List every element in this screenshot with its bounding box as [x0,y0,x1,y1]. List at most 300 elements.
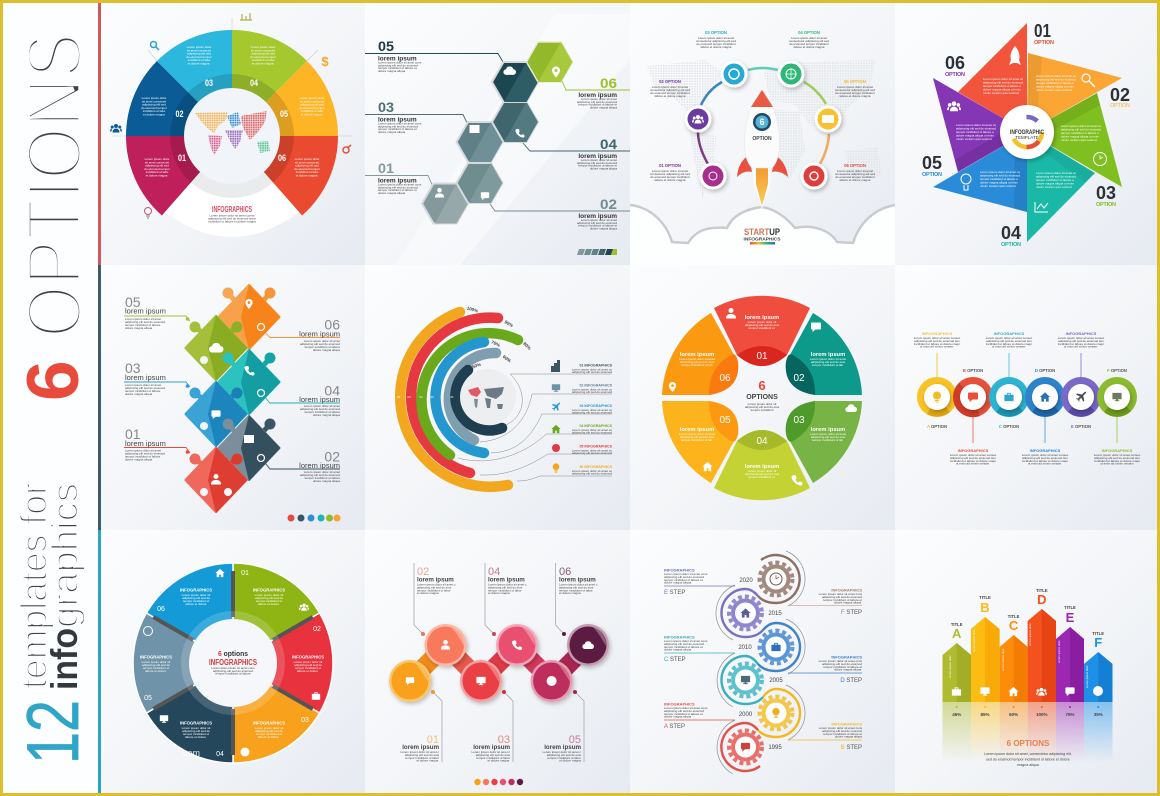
label 02: Lorem ipsum dolor sit amet [304,470,340,474]
top labels: et dolore magna [417,591,439,595]
sector numbers: 05 [280,109,288,119]
label 02: 02 [324,448,340,464]
blade blue [933,132,1027,212]
infographics headings: INFOGRAPHICS [1066,331,1097,336]
blade text: adipiscing elit sed do eiusmod [980,174,1020,178]
sector 01 [714,296,810,366]
sector numbers: 03 [205,78,213,88]
sector text: do eiusmod tempor [141,106,167,110]
sector text: et dolore magna [252,62,274,66]
bottom labels: et dolore magna [487,759,509,763]
label 06: 06 [324,316,340,332]
title labels: TITLE [1008,614,1020,619]
panel: startup rocket [630,30,895,265]
label 05: lorem ipsum [125,306,166,316]
label 06: adipiscing elit sed do eiusmod [300,342,340,346]
top labels: adipiscing elit sed do eius [559,585,594,589]
body text: adipiscing elit sed do eiusmod tem [1022,456,1068,460]
sector text: sit amet consectet [187,48,211,52]
sector body: labore et dolore [297,669,318,673]
body text: adipiscing elit sed do eiusmod tem [914,339,960,343]
option labels: 03 OPTION [705,30,727,35]
label 03: dolore magna aliqua [125,392,153,396]
sector body: adipiscing elit sed do eius [680,435,715,439]
connecting arcs [698,68,829,164]
top labels: 02 [417,566,429,578]
right labels [819,588,862,751]
label 06: tempor incididunt ut labore [305,345,340,349]
panel: rainbow arcs [397,306,613,487]
piece teal [219,349,280,415]
letter labels: B [980,600,990,615]
left labels: tempor incididunt ut labore et [664,712,703,716]
option captions: OPTION [1110,103,1130,109]
left labels: INFOGRAPHICS [664,568,695,572]
label 01: 01 [378,160,394,176]
centre label [745,378,780,412]
option body text: consectetur adipiscing elit sed [835,88,875,92]
gear 2015 [729,596,762,630]
legend body: adipiscing elit sed do eiusmod [572,370,612,374]
top labels: Lorem ipsum dolor sit amet c [417,582,456,586]
right labels: INFOGRAPHICS [831,654,862,660]
label 01: adipiscing elit sed do eiusmod [378,185,418,189]
blade text: Lorem ipsum dolor sit amet co [980,170,1021,174]
bubble 05 [531,660,573,702]
option captions: OPTION [922,172,942,178]
option captions [922,40,1130,248]
sector headings [140,588,324,726]
vertical bar text [948,623,1089,688]
sector 01 [233,563,320,663]
sector body: Lorem ipsum dolor sit [294,660,322,664]
sector text: sit amet consectet [300,99,324,103]
ring 1 [917,377,957,417]
bar E [1056,627,1084,702]
piece green [186,315,248,381]
right labels: tempor incididunt ut labore et [823,598,862,602]
label 04: lorem ipsum [299,395,340,404]
infographics label: INFOGRAPHICS [212,205,252,214]
infographics body: Lorem ipsum dolor sit amet conse [209,214,255,218]
arc numbers: 06 [397,395,400,399]
vertical bar text: Lorem ipsum dolor [1085,665,1089,688]
blade purple [933,78,1027,172]
top labels: lorem ipsum [488,576,525,584]
sector text: sit amet consectet [251,48,275,52]
body text: Lorem ipsum dolor sit amet consec [950,453,997,457]
bottom labels: Lorem ipsum dolor sit amet c [471,750,510,754]
body text: ut enim ad minim veniam [1100,462,1134,466]
numbers: 02 [793,373,805,384]
sector numbers: 04 [216,751,224,758]
sector text: sit amet consectet [145,160,169,164]
option body text: consectetur adipiscing elit sed [835,172,875,176]
year labels [738,578,783,751]
vertical title: 6 [13,360,94,401]
bottom labels: 01 [427,734,439,746]
option captions: OPTION [1034,40,1054,46]
label 02: adipiscing elit sed do eiusmod [577,221,617,225]
sector numbers: 06 [278,153,286,163]
sector 02 [786,313,862,395]
sector body: tempor incididunt ut [256,599,282,603]
percent labels: 35% [1094,712,1103,717]
sector text: et dolore magna [143,112,165,116]
bottom labels: et dolore magna [416,759,438,763]
vertical bar text: Lorem ipsum dolor [1001,648,1005,671]
bubble 03 [460,660,502,702]
arcs [400,312,518,487]
bottom labels [400,734,581,763]
label 03: Lorem ipsum dolor sit amet [125,383,161,387]
infographics body: incididunt ut labore et dolore magna [208,220,256,224]
option body text: consectetur adipiscing elit sed [650,172,690,176]
diagonal light band [395,14,630,265]
letter labels: A [952,626,962,641]
right labels: dolore magna aliqua [834,601,861,605]
sector text: Lorem ipsum dolor [142,96,166,100]
sector 03 [786,401,862,483]
option captions: OPTION [1001,242,1021,248]
letter labels: F [1094,635,1102,650]
vertical title: templates for [14,483,54,689]
option labels: C OPTION [999,424,1019,429]
body text: ut enim ad minim veniam [956,462,990,466]
leader lines [124,316,340,469]
sector body: tempor incididunt ut [183,599,209,603]
options body: magna aliqua [1017,763,1039,767]
legend text [579,364,613,469]
sector headings: INFOGRAPHICS [180,588,212,592]
leader lines [664,586,862,740]
label 02: tempor incididunt ut labore et [578,224,617,228]
top labels: 06 [559,566,571,578]
label 03 [378,99,422,134]
year labels: 2005 [769,678,783,684]
centre label: tempor incididunt [751,408,774,412]
sector numbers: 02 [176,109,184,119]
top labels: et dolore magna [488,591,510,595]
option labels [659,30,866,168]
blade text: Lorem ipsum dolor sit amet co [1061,124,1102,128]
numbers: 01 [756,351,768,362]
numbers: 06 [719,373,731,384]
label 05: 05 [378,38,394,54]
option labels: 01 [1034,21,1051,41]
label 02: lorem ipsum [299,461,340,470]
body text: Lorem ipsum dolor sit amet consec [1058,336,1105,340]
gear 2020 [760,562,792,596]
arc numbers: 01 [450,395,454,399]
percent labels: 75% [1065,712,1075,717]
sector body: labore et dolore [258,602,279,606]
title labels: TITLE [951,622,963,627]
sector body: tempor incididunt ut lab [812,363,843,367]
top labels: tempor incididunt ut labor [417,588,451,592]
sector text: incididunt ut labo [188,58,211,62]
centre title [1010,130,1045,140]
numbers: 05 [719,415,731,426]
numbers [719,351,805,447]
option body text: labore et dolore magna [794,45,825,49]
option body text: Lorem ipsum dolor sit amet [652,85,688,89]
sector 05 [662,401,738,483]
percent labels: 60% [1009,712,1018,717]
label 03: adipiscing elit sed do eiusmod [125,386,165,390]
option labels: E OPTION [1071,424,1091,429]
option 05 [814,106,842,132]
inner circle [184,88,280,184]
right labels: Lorem ipsum dolor sit amet cons [819,592,862,596]
left labels: Lorem ipsum dolor sit amet cons [664,572,708,576]
hex 05 [492,62,538,102]
option body text: consectetur adipiscing elit sed [650,88,690,92]
label 03: tempor incididunt ut labore et [378,127,417,131]
panel: arrow bar chart [942,588,1112,767]
sector body: labore et dolore [185,735,206,739]
label 03: tempor incididunt ut labore [125,389,161,393]
right labels: adipiscing elit sed do eiusmod [822,595,862,599]
sector body: tempor incididunt ut [256,732,282,736]
legend body: Lorem ipsum dolor sit amet co [572,428,612,432]
hex 03 [456,122,502,162]
bubble 01 [389,660,431,702]
label 05: dolore magna aliqua [378,69,406,73]
sector body: adipiscing elit sed do eius [811,360,846,364]
blade text: dolore magna aliqua ut enim [1036,182,1074,186]
letter labels: D [1037,592,1046,607]
percent labels: 70% [490,339,501,348]
blade text: dolore magna aliqua ut enim [956,134,994,138]
leader dots [421,632,577,694]
legend body: adipiscing elit sed do eiusmod [572,410,612,414]
percent labels: 60% [502,354,512,363]
body text: incididunt ut labore et dolore magn [1094,459,1140,463]
label 02: dolore magna aliqua [590,226,617,230]
infographics headings [922,331,1133,453]
top labels: et dolore magna [559,591,581,595]
blade text: dolore magna aliqua ut enim [980,180,1018,184]
option labels: D OPTION [1035,368,1055,373]
label 03: lorem ipsum [125,373,166,382]
left labels: A STEP [664,724,685,730]
label 05: dolore magna aliqua [125,326,153,330]
label 04: Lorem ipsum dolor sit amet [304,404,340,408]
left labels: adipiscing elit sed do eiusmod [664,709,704,713]
title labels: TITLE [979,595,991,600]
right labels: INFOGRAPHICS [831,588,862,592]
option labels: 05 [922,153,942,173]
label 06 [299,316,340,352]
right labels: Lorem ipsum dolor sit amet cons [819,726,862,730]
central sphere [460,369,516,425]
label 01: dolore magna aliqua [125,458,153,462]
label 06: lorem ipsum [299,330,340,338]
thin outer arcs [716,551,805,774]
bottom labels: lorem ipsum [544,744,581,751]
sector icons [669,308,857,486]
blade text: adipiscing elit sed do eiusmod [956,126,996,130]
top labels: tempor incididunt ut labor [488,588,522,592]
sector headings: INFOGRAPHICS [292,654,324,660]
panel: gear timeline [664,551,862,774]
blade text: tempor incididunt ut labore e [956,130,994,134]
label 02: 02 [600,196,617,212]
option labels: 01 OPTION [659,163,681,168]
legend text: 01 INFOGRAPHICS [579,364,613,368]
startup title: INFOGRAPHICS [744,236,780,242]
legend body: Lorem ipsum dolor sit amet co [572,368,612,372]
bottom labels: lorem ipsum [473,744,510,751]
panel: six-petal circle [662,296,862,500]
sector body: adipiscing elit sed do eius [745,323,780,327]
sector body: Lorem ipsum dolor sit [255,593,284,597]
right labels: Lorem ipsum dolor sit amet cons [819,659,862,663]
sector body: tempor incididunt ut [748,475,775,479]
sector numbers: 05 [144,695,152,702]
top labels: adipiscing elit sed do eius [488,585,523,589]
option labels: A OPTION [927,424,947,429]
blade text: adipiscing elit sed do eiusmod [1036,78,1076,82]
option labels: B OPTION [963,368,983,373]
rocket [737,90,788,209]
right labels: tempor incididunt ut labore et [823,665,862,669]
label 06: tempor incididunt ut labore et [578,103,617,107]
sector body: labore et dolore [258,735,279,739]
legend body: Lorem ipsum dolor sit amet co [572,388,612,392]
sector body: Lorem ipsum dolor sit amet [810,357,846,361]
blade text: dolore magna aliqua ut enim [983,88,1021,92]
label 06: lorem ipsum [578,92,617,99]
sector text: do eiusmod tempor [299,106,325,110]
leader lines [458,374,612,481]
label 04: tempor incididunt ut labore et [578,164,617,168]
blade text: Lorem ipsum dolor sit amet co [1036,171,1077,175]
sector text: adipiscing elit sed [145,164,169,168]
label 02: tempor incididunt ut labore [305,476,340,480]
label 01: Lorem ipsum dolor sit amet [125,448,161,452]
leader lines [365,54,630,211]
centre badge [1000,105,1054,159]
label 03: dolore magna aliqua [378,130,406,134]
vertical title: graphics [44,483,86,628]
sector 05 [232,61,338,136]
left labels: dolore magna aliqua [664,581,692,585]
blade text: tempor incididunt ut labore e [1036,178,1074,182]
percent labels: 46% [952,712,961,717]
left labels: E STEP [664,590,685,596]
sector 03 [233,663,320,763]
blade text: tempor incididunt ut labore e [1036,81,1074,85]
bottom labels: adipiscing elit sed do eius [405,753,439,757]
panel: hexagon chain [365,14,630,265]
ring 4 [1025,377,1065,417]
panel: six-sector donut [39,563,333,763]
sector body: adipiscing elit sed do [182,729,210,733]
sector 03 [157,30,232,136]
option labels [927,368,1127,429]
body text: incididunt ut labore et dolore magn [1022,459,1068,463]
sector text: adipiscing elit sed [295,164,319,168]
label 04: Lorem ipsum dolor sit amet [581,158,617,162]
left labels: INFOGRAPHICS [664,634,695,640]
arc numbers [397,395,454,399]
option body text: Lorem ipsum dolor sit amet [791,36,827,40]
option labels: 06 [945,53,965,73]
right labels: dolore magna aliqua [834,668,861,672]
option body text: labore et dolore magna [655,178,686,182]
sector headings: lorem ipsum [680,427,714,433]
sector body: tempor incididunt ut [183,732,209,736]
outer icons [110,13,351,218]
gear 2005 [729,664,762,696]
dark separators [153,571,313,755]
panel: pinwheel [922,21,1130,248]
centre text: tempor incididunt ut labore [215,672,251,676]
bar D [1028,609,1056,702]
body text: Lorem ipsum dolor sit amet consec [1022,453,1069,457]
sector body: adipiscing elit sed do [142,663,170,667]
centre title: INFOGRAPHIC [1010,130,1045,136]
letter labels: C [1009,618,1019,633]
sector headings: lorem ipsum [811,427,845,433]
label 06: dolore magna aliqua [590,105,617,109]
white bottom sector [165,136,299,237]
sector numbers [176,78,288,163]
gear 2010 [760,630,792,664]
sector 05 [133,613,233,713]
sector headings: INFOGRAPHICS [253,588,285,592]
sector text: incididunt ut labo [296,170,319,174]
numbers: 04 [756,436,768,447]
legend text: 04 INFOGRAPHICS [579,424,613,428]
label 01: lorem ipsum [378,178,417,184]
vertical bar text: Lorem ipsum dolor [972,629,976,652]
bottom labels: Lorem ipsum dolor sit amet c [400,750,439,754]
label 02: lorem ipsum [578,213,617,220]
watermark: com [183,748,200,758]
cloud fill [630,205,895,265]
label 04: 04 [600,136,617,152]
options body: Lorem ipsum dolor sit amet, consectetur adipiscing elit, [984,752,1072,756]
left labels: C STEP [664,657,686,663]
light inner ring [181,611,285,715]
label 06 [577,75,617,109]
options heading: 6 OPTIONS [1007,739,1050,748]
option body text: labore et dolore magna [840,178,871,182]
sector text: do eiusmod tempor [144,167,170,171]
label 05: adipiscing elit sed do eiusmod [125,320,165,324]
centre label: adipiscing elit sed do eius [745,405,780,409]
label 01 [125,426,166,462]
label 01: dolore magna aliqua [378,191,406,195]
percent labels: 100% [466,306,479,313]
ring 6 [1097,377,1137,417]
option 02 [684,106,712,132]
label 02: adipiscing elit sed do eiusmod [300,473,340,477]
piece red [186,447,248,513]
arc numbers: 02 [440,395,444,399]
blade text: dolore magna aliqua ut enim [1061,134,1099,138]
label 05: 05 [125,294,141,310]
label 03: Lorem ipsum dolor sit amet cons [378,122,422,126]
sector text: adipiscing elit sed [142,103,166,107]
infographics headings: INFOGRAPHICS [994,331,1025,336]
label 05: Lorem ipsum dolor sit amet [125,317,161,321]
sector numbers [144,570,321,758]
percent labels [952,712,1103,717]
